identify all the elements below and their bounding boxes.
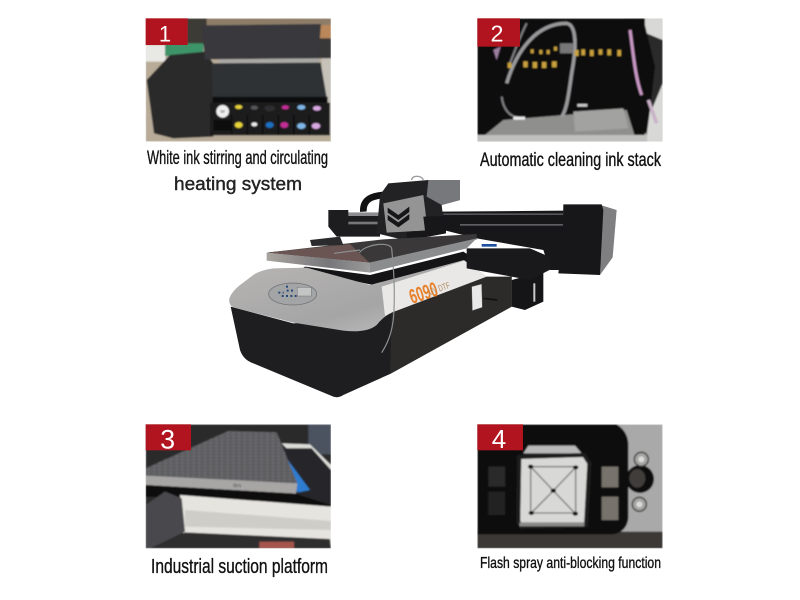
handle <box>483 298 497 301</box>
right end housing <box>558 204 617 275</box>
photo: ink circulation unit: W <box>220 109 225 115</box>
photo: perforated platform <box>146 424 331 548</box>
caption: industrial suction: Industrial suction platform <box>151 556 328 578</box>
caption: heating system: heating system <box>174 174 302 194</box>
model label: UV DTF <box>427 280 452 297</box>
panel 3: industrial suction platform <box>146 424 331 548</box>
infographic canvas <box>146 18 663 578</box>
number badge 3 <box>146 424 191 455</box>
number badge 1: 1 <box>159 21 171 46</box>
number badge 3: 3 <box>160 425 175 455</box>
machine base <box>231 277 512 397</box>
printer gantry rail <box>328 195 563 270</box>
photo: ink circulation unit <box>146 18 331 142</box>
lower cabinet and column <box>467 248 551 310</box>
dark machine deck below platform <box>300 252 477 285</box>
model label: 6090 <box>406 277 441 309</box>
number badge 1 <box>146 18 188 46</box>
main printer illustration <box>229 176 617 397</box>
number badge 2 <box>477 18 520 47</box>
dark side panel <box>390 277 512 374</box>
vacuum platform <box>267 234 477 273</box>
number badge 2: 2 <box>491 21 503 47</box>
photo: capping station <box>477 424 663 548</box>
caption: white ink stirring: White ink stirring and circulating <box>147 148 328 169</box>
white side band <box>382 261 487 316</box>
photo: ink stack and tubing <box>477 18 663 142</box>
loose cable <box>334 244 394 353</box>
number badge 4 <box>477 424 523 454</box>
silver top cover <box>229 260 487 331</box>
number badge 4: 4 <box>492 424 506 454</box>
panel 1: white ink system <box>146 18 331 142</box>
safety sticker <box>472 284 482 311</box>
print carriage <box>377 176 460 241</box>
caption: automatic cleaning: Automatic cleaning ink stack <box>480 150 661 171</box>
photo: perforated platform: f2r1 <box>233 483 242 488</box>
control panel <box>269 283 317 305</box>
panel 2: automatic cleaning ink stack <box>477 18 663 142</box>
caption: flash spray: Flash spray anti-blocking function <box>480 555 661 572</box>
panel 4: flash spray anti-blocking <box>477 424 663 548</box>
